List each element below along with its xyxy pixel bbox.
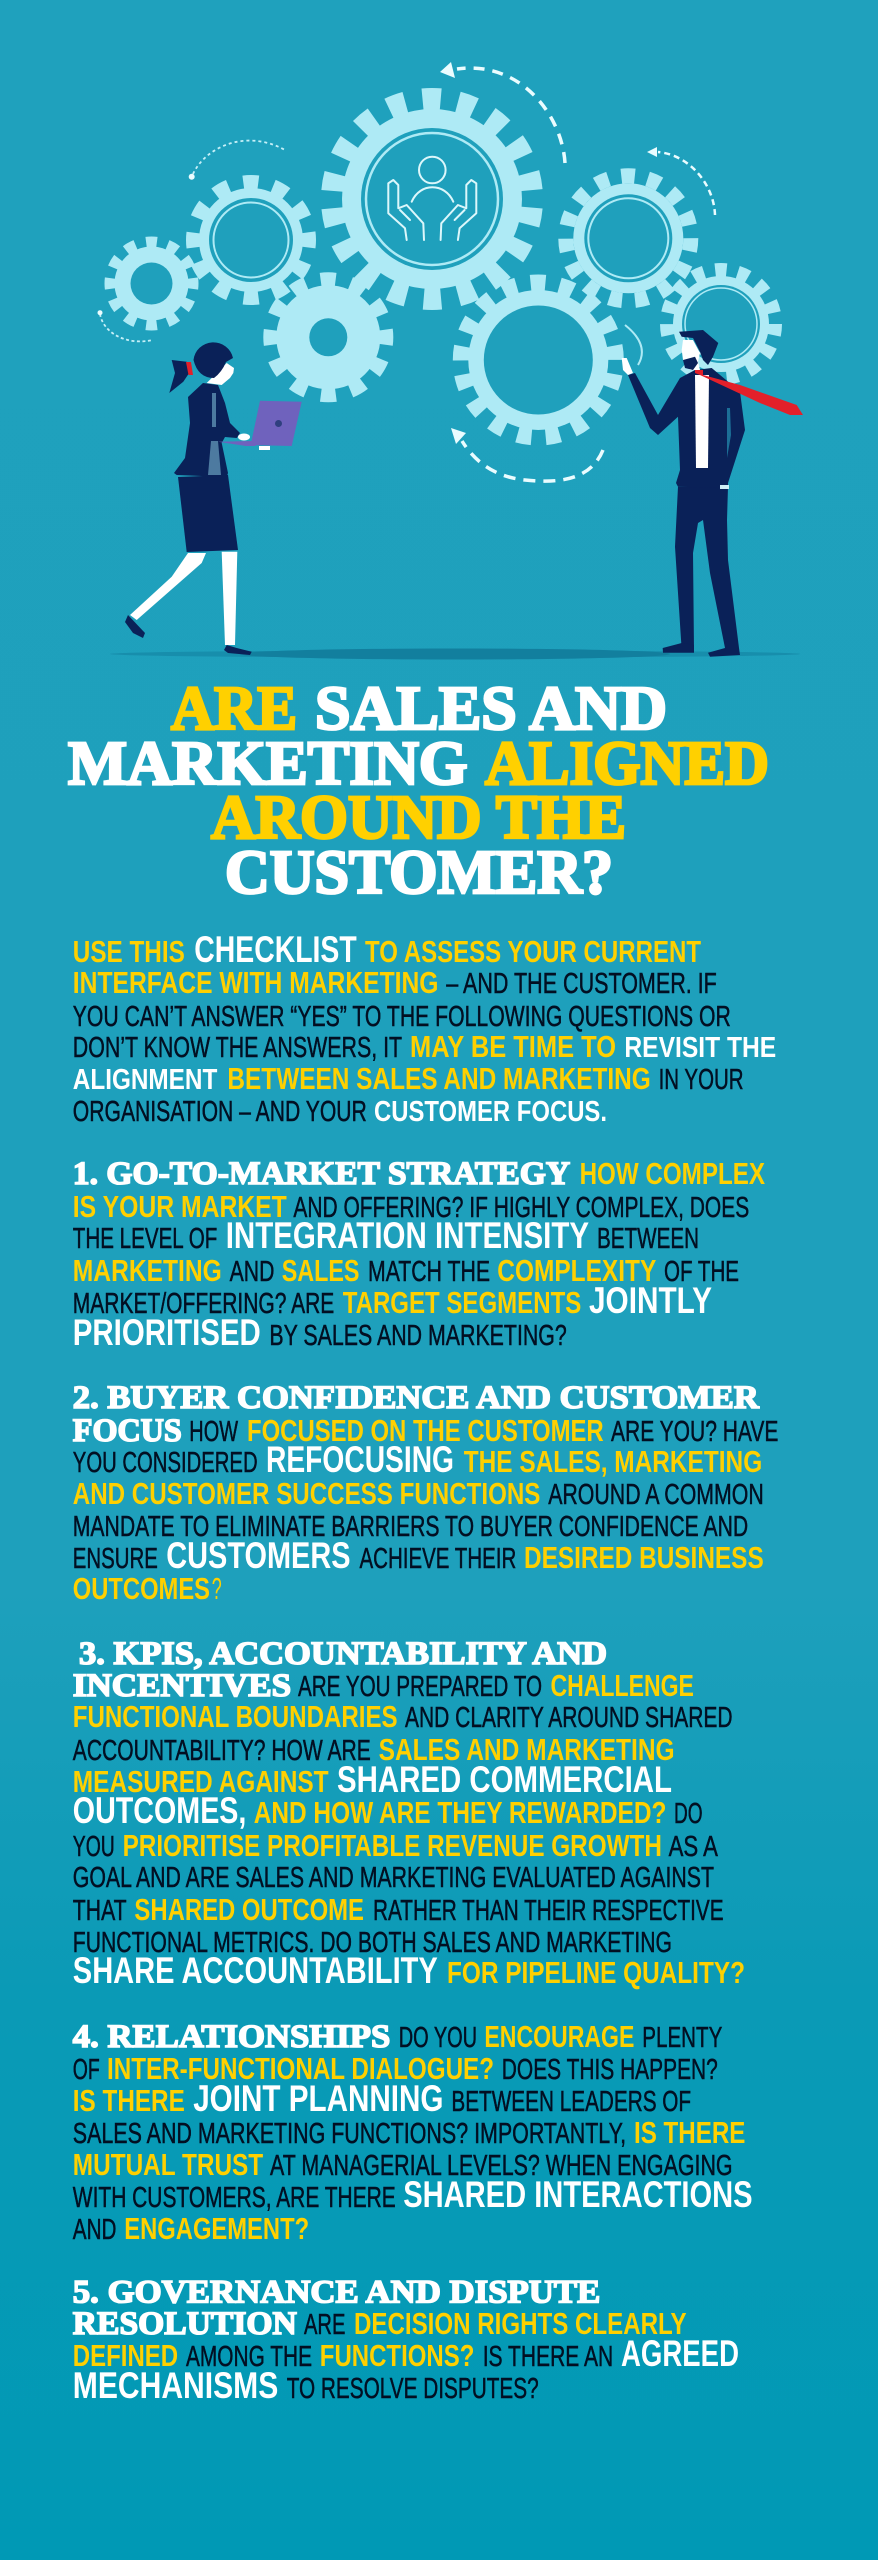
gear: central with customer icon xyxy=(332,99,532,299)
section 3: KPIs, accountability and incentives: 3. KPIS, ACCOUNTABILITY AND xyxy=(79,1636,607,1672)
section 5: governance and dispute resolution: IS THERE AN xyxy=(483,2341,613,2373)
section 2: buyer confidence and customer focus: ENSURE xyxy=(73,1543,158,1575)
section 1: go-to-market strategy: TARGET SEGMENTS xyxy=(343,1286,581,1320)
intro text block: INTERFACE WITH MARKETING xyxy=(73,966,439,1000)
section 1: go-to-market strategy: COMPLEXITY xyxy=(497,1254,656,1288)
section 4: relationships: IS THERE xyxy=(73,2084,185,2118)
intro text block: ALIGNMENT xyxy=(73,1064,218,1096)
section 3: KPIs, accountability and incentives: SHARED COMMERCIAL xyxy=(337,1759,672,1800)
section 3: KPIs, accountability and incentives: AS A xyxy=(669,1831,718,1863)
gear: solid lower centre xyxy=(270,279,386,395)
section 3: KPIs, accountability and incentives xyxy=(73,1636,745,1991)
gear: upper left xyxy=(193,182,309,298)
gear: large lower right xyxy=(461,283,615,437)
intro text block: MAY BE TIME TO xyxy=(410,1030,616,1064)
section 1: go-to-market strategy: PRIORITISED xyxy=(73,1312,261,1353)
section 2: buyer confidence and customer focus: CUSTOMERS xyxy=(166,1535,350,1576)
intro text block: BETWEEN SALES AND MARKETING xyxy=(227,1062,651,1096)
intro text block xyxy=(73,929,776,1128)
section 4: relationships: PLENTY xyxy=(642,2022,722,2054)
section 2: buyer confidence and customer focus: ACHIEVE THEIR xyxy=(360,1543,516,1575)
section 3: KPIs, accountability and incentives: INCENTIVES xyxy=(73,1668,291,1704)
section 4: relationships: BETWEEN LEADERS OF xyxy=(451,2086,691,2118)
arrow: dotted arc upper left xyxy=(189,141,285,180)
section 2: buyer confidence and customer focus: 2. BUYER CONFIDENCE AND CUSTOMER xyxy=(73,1380,759,1416)
section 1: go-to-market strategy: AND xyxy=(230,1256,274,1288)
section 5: governance and dispute resolution: MECHANISMS xyxy=(73,2365,278,2406)
section 4: relationships: MUTUAL TRUST xyxy=(73,2148,263,2182)
section 3: KPIs, accountability and incentives: FUNCTIONAL BOUNDARIES xyxy=(73,1700,398,1734)
section 3: KPIs, accountability and incentives: RATHER THAN THEIR RESPECTIVE xyxy=(373,1895,724,1927)
arrow: dashed arc below large gear xyxy=(451,428,603,481)
section 2: buyer confidence and customer focus: REFOCUSING xyxy=(266,1439,454,1480)
intro text block: IN YOUR xyxy=(659,1064,744,1096)
section 2: buyer confidence and customer focus: ? xyxy=(212,1572,222,1606)
section 5: governance and dispute resolution: FUNCTIONS? xyxy=(320,2339,474,2373)
gear: small left xyxy=(110,242,192,324)
section 3: KPIs, accountability and incentives: YOU xyxy=(73,1831,115,1863)
section 3: KPIs, accountability and incentives: ACCOUNTABILITY? HOW ARE xyxy=(73,1735,371,1767)
section 4: relationships: ENCOURAGE xyxy=(484,2020,634,2054)
section 3: KPIs, accountability and incentives: SHARED OUTCOME xyxy=(134,1893,364,1927)
section 3: KPIs, accountability and incentives: CHALLENGE xyxy=(550,1669,694,1703)
section 5: governance and dispute resolution: RESOLUTION xyxy=(73,2306,297,2342)
section 3: KPIs, accountability and incentives: SHARE ACCOUNTABILITY xyxy=(73,1950,438,1991)
section 2: buyer confidence and customer focus xyxy=(73,1380,778,1606)
section 4: relationships: DO YOU xyxy=(399,2022,477,2054)
section 3: KPIs, accountability and incentives: DO xyxy=(674,1798,703,1830)
section 4: relationships: AND xyxy=(73,2214,116,2246)
section 5: governance and dispute resolution: AGREED xyxy=(621,2333,739,2374)
section 4: relationships xyxy=(73,2019,753,2246)
section 2: buyer confidence and customer focus: YOU CONSIDERED xyxy=(73,1447,258,1479)
section 3: KPIs, accountability and incentives: AND CLARITY AROUND SHARED xyxy=(405,1702,733,1734)
section 5: governance and dispute resolution xyxy=(73,2274,739,2406)
section 4: relationships: ENGAGEMENT? xyxy=(124,2212,309,2246)
section 5: governance and dispute resolution: ARE xyxy=(304,2309,345,2341)
section 4: relationships: IS THERE xyxy=(634,2116,745,2150)
section 4: relationships: WITH CUSTOMERS, ARE THERE xyxy=(73,2182,396,2214)
section 3: KPIs, accountability and incentives: SALES AND MARKETING xyxy=(379,1733,675,1767)
section 1: go-to-market strategy: THE LEVEL OF xyxy=(73,1223,217,1255)
section 2: buyer confidence and customer focus: AND CUSTOMER SUCCESS FUNCTIONS xyxy=(73,1477,540,1511)
section 3: KPIs, accountability and incentives: MEASURED AGAINST xyxy=(73,1765,329,1799)
section 4: relationships: INTER-FUNCTIONAL DIALOGUE? xyxy=(107,2052,494,2086)
section 4: relationships: OF xyxy=(73,2054,100,2086)
intro text block: CUSTOMER FOCUS. xyxy=(374,1096,607,1128)
section 2: buyer confidence and customer focus: ARE YOU? HAVE xyxy=(611,1416,778,1448)
title: ARE xyxy=(171,675,297,743)
section 1: go-to-market strategy: HOW COMPLEX xyxy=(580,1157,766,1191)
title: CUSTOMER? xyxy=(225,839,613,907)
section 3: KPIs, accountability and incentives: ARE YOU PREPARED TO xyxy=(298,1671,542,1703)
section 1: go-to-market strategy: IS YOUR MARKET xyxy=(73,1190,287,1224)
section 4: relationships: DOES THIS HAPPEN? xyxy=(502,2054,718,2086)
section 2: buyer confidence and customer focus: THE SALES, MARKETING xyxy=(464,1445,762,1479)
section 4: relationships: 4. RELATIONSHIPS xyxy=(73,2019,390,2055)
section 2: buyer confidence and customer focus: HOW xyxy=(189,1416,238,1448)
icon: person held in hands xyxy=(388,157,476,240)
title: AROUND THE xyxy=(211,784,626,852)
section 1: go-to-market strategy: 1. GO-TO-MARKET STRATEGY xyxy=(73,1156,570,1192)
gear: far right xyxy=(667,270,775,378)
intro text block: TO ASSESS YOUR CURRENT xyxy=(365,935,701,969)
figure: woman with laptop xyxy=(125,342,302,655)
intro text block: CHECKLIST xyxy=(194,929,357,970)
arrow: dashed arc over central gear xyxy=(440,62,565,163)
figure: man with red tie xyxy=(622,325,803,657)
section 3: KPIs, accountability and incentives: OUTCOMES, xyxy=(73,1790,246,1831)
section 2: buyer confidence and customer focus: FOCUS xyxy=(73,1413,182,1449)
section 3: KPIs, accountability and incentives: THAT xyxy=(73,1895,127,1927)
intro text block: ORGANISATION – AND YOUR xyxy=(73,1096,367,1128)
illustration: gears and business people xyxy=(98,62,803,660)
section 1: go-to-market strategy: JOINTLY xyxy=(589,1280,712,1321)
section 3: KPIs, accountability and incentives: AND HOW ARE THEY REWARDED? xyxy=(254,1796,666,1830)
section 4: relationships: SALES AND MARKETING FUNCTIONS? IMPORTANTLY, xyxy=(73,2118,626,2150)
section 3: KPIs, accountability and incentives: FUNCTIONAL METRICS. DO BOTH SALES AND MARKETING xyxy=(73,1927,672,1959)
section 1: go-to-market strategy: MARKETING xyxy=(73,1254,222,1288)
section 1: go-to-market strategy: OF THE xyxy=(664,1256,739,1288)
title: ALIGNED xyxy=(485,730,769,798)
section 3: KPIs, accountability and incentives: FOR PIPELINE QUALITY? xyxy=(447,1956,745,1990)
section 2: buyer confidence and customer focus: OUTCOMES xyxy=(73,1572,210,1606)
intro text block: REVISIT THE xyxy=(624,1032,776,1064)
section 1: go-to-market strategy: MATCH THE xyxy=(368,1256,490,1288)
intro text block: USE THIS xyxy=(73,935,185,969)
section 1: go-to-market strategy: INTEGRATION INTENSITY xyxy=(226,1215,589,1256)
section 2: buyer confidence and customer focus: FOCUSED ON THE CUSTOMER xyxy=(247,1414,604,1448)
section 4: relationships: SHARED INTERACTIONS xyxy=(403,2174,753,2215)
section 3: KPIs, accountability and incentives: PRIORITISE PROFITABLE REVENUE GROWTH xyxy=(123,1829,662,1863)
section 5: governance and dispute resolution: AMONG THE xyxy=(186,2341,312,2373)
intro text block: – AND THE CUSTOMER. IF xyxy=(446,968,717,1000)
arrow: dotted arc lower left xyxy=(98,310,153,341)
arrow: dashed arc right xyxy=(647,147,715,215)
intro text block: DON’T KNOW THE ANSWERS, IT xyxy=(73,1032,402,1064)
section 2: buyer confidence and customer focus: DESIRED BUSINESS xyxy=(524,1541,764,1575)
section 5: governance and dispute resolution: 5. GOVERNANCE AND DISPUTE xyxy=(73,2274,600,2310)
title xyxy=(68,675,769,907)
section 1: go-to-market strategy: SALES xyxy=(282,1254,360,1288)
section 1: go-to-market strategy: BY SALES AND MARKETING? xyxy=(269,1320,567,1352)
section 5: governance and dispute resolution: TO RESOLVE DISPUTES? xyxy=(287,2373,539,2405)
section 2: buyer confidence and customer focus: AROUND A COMMON xyxy=(548,1479,764,1511)
section 4: relationships: JOINT PLANNING xyxy=(193,2078,444,2119)
section 5: governance and dispute resolution: DECISION RIGHTS CLEARLY xyxy=(354,2307,687,2341)
title: MARKETING xyxy=(68,730,468,798)
section 5: governance and dispute resolution: DEFINED xyxy=(73,2339,178,2373)
gear: right xyxy=(566,176,691,301)
section 1: go-to-market strategy: MARKET/OFFERING? ARE xyxy=(73,1288,334,1320)
section 1: go-to-market strategy xyxy=(73,1156,766,1353)
section 1: go-to-market strategy: BETWEEN xyxy=(597,1223,699,1255)
title: SALES AND xyxy=(315,675,667,743)
ground shadow xyxy=(110,648,800,660)
section 4: relationships: AT MANAGERIAL LEVELS? WHEN ENGAGING xyxy=(270,2150,733,2182)
